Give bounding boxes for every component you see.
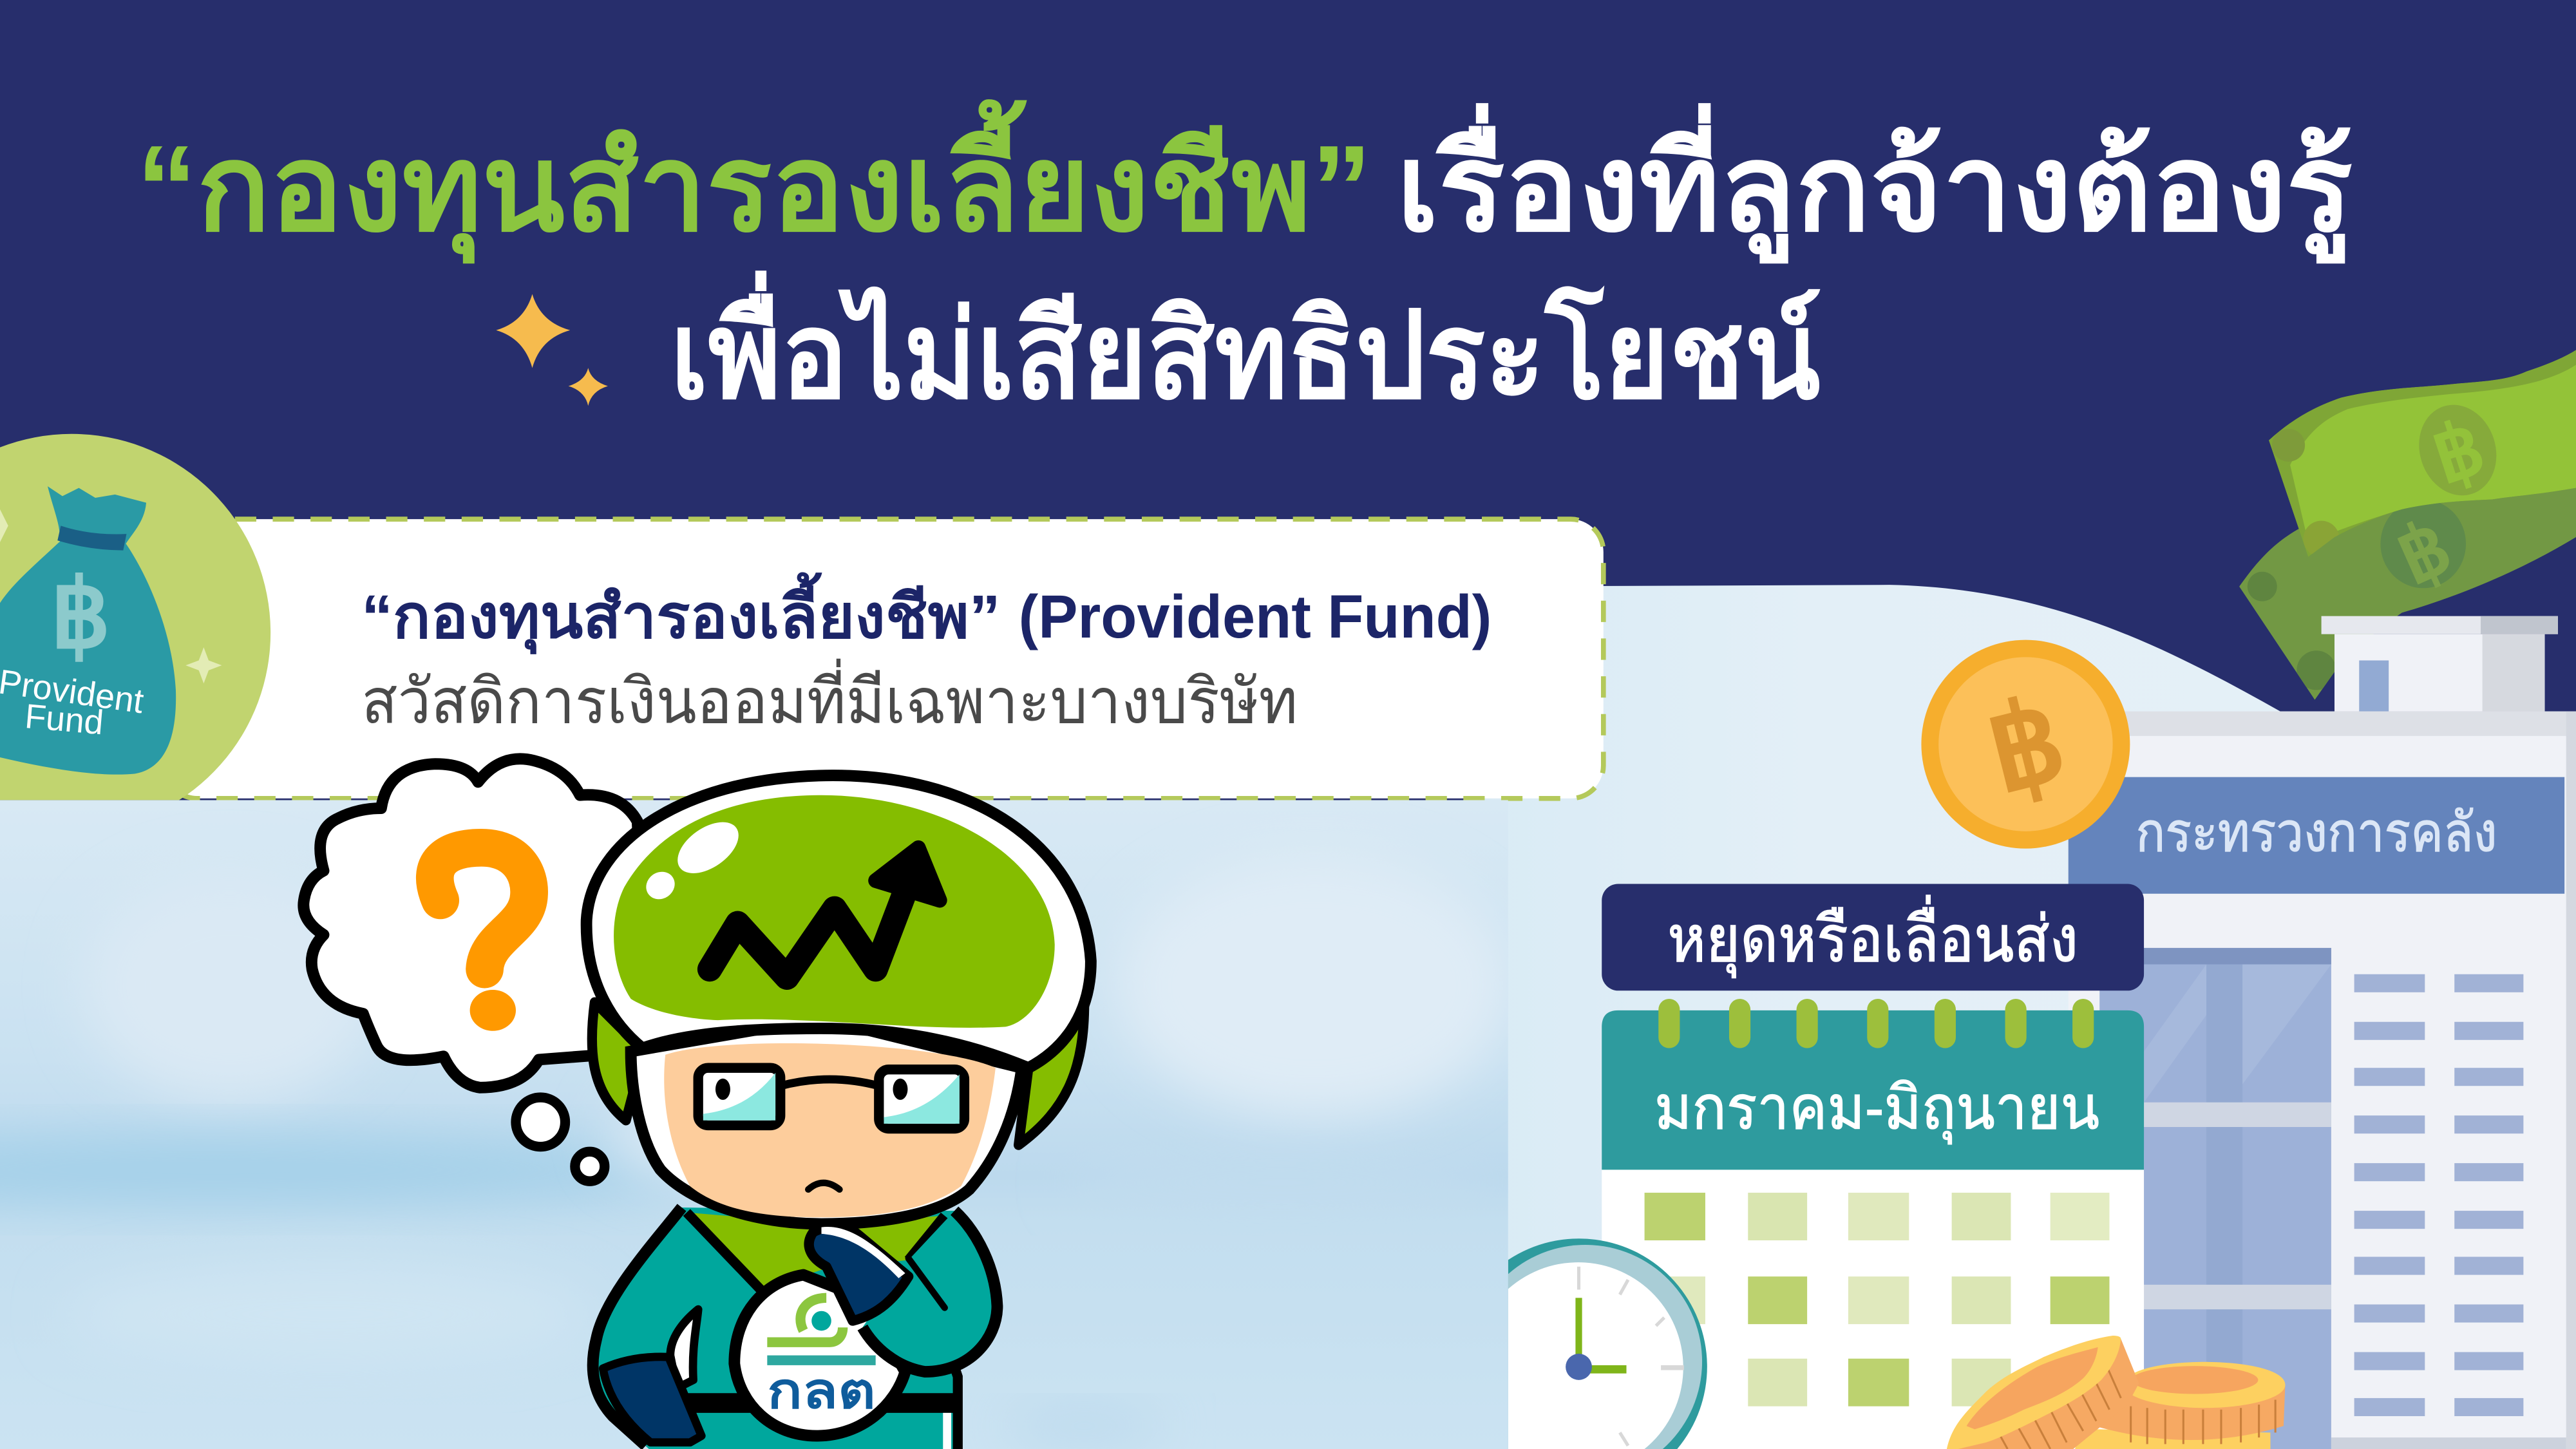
bottom coin — [2075, 1429, 2271, 1449]
badge — [734, 1275, 905, 1436]
calendar header — [1602, 1010, 2144, 1170]
title — [137, 99, 2353, 424]
title line 1 green: “กองทุนสำรองเลี้ยงชีพ” — [137, 99, 1372, 263]
calendar day cells — [1645, 1193, 2110, 1406]
calendar — [1602, 884, 2144, 1449]
ministry sign — [2069, 777, 2564, 894]
definition text: สวัสดิการเงินออมที่มีเฉพาะบางบริษัท — [361, 658, 1298, 736]
stop or postpone label: หยุดหรือเลื่อนส่ง — [1667, 895, 2078, 978]
ear flaps — [592, 1002, 1084, 1145]
belt — [682, 1393, 958, 1413]
helmet — [587, 775, 1091, 1068]
right arm and glove — [809, 1211, 997, 1372]
back banknote — [2239, 488, 2576, 699]
roof band — [2073, 712, 2576, 736]
stop or postpone label — [1602, 884, 2144, 990]
icon: gold coin — [1921, 640, 2130, 849]
month label: มกราคม-มิถุนายน — [1654, 1075, 2099, 1145]
body — [593, 1208, 998, 1449]
facade — [2069, 736, 2566, 1449]
back banknote: ฿ — [2385, 504, 2463, 600]
calendar sheet — [1602, 1150, 2144, 1449]
glass front — [2099, 948, 2331, 1449]
ministry sign: กระทรวงการคลัง — [2136, 802, 2497, 862]
banknotes — [2239, 350, 2576, 700]
rooftop box — [2334, 634, 2545, 712]
icon: rising chart arrow — [710, 848, 940, 978]
glasses — [698, 1068, 964, 1129]
icon: gold coin: ฿ — [1975, 674, 2077, 817]
icon: money bag: Provident — [0, 663, 146, 721]
face — [631, 1019, 1022, 1224]
building: ministry of finance — [2069, 616, 2576, 1449]
definition heading thai: “กองทุนสำรองเลี้ยงชีพ” — [361, 572, 1001, 654]
icon: gold coin stack — [1947, 1336, 2285, 1449]
front banknote — [2269, 350, 2576, 557]
icon: money bag: Fund — [23, 697, 105, 742]
pale background hill — [1479, 585, 2576, 1449]
sky backdrop — [0, 800, 1511, 1449]
front banknote: ฿ — [2422, 404, 2494, 500]
tilted coin — [1947, 1336, 2139, 1449]
icon: money bag: ฿ — [50, 562, 111, 668]
panel: definition — [164, 519, 1604, 799]
character: thinking mascot — [303, 759, 1091, 1449]
title line 1 white: เรื่องที่ลูกจ้างต้องรู้ — [1396, 103, 2353, 264]
spiral rings — [1658, 999, 2094, 1048]
title line 2: เพื่อไม่เสียสิทธิประโยชน์ — [670, 270, 1821, 424]
badge: กลต — [767, 1364, 876, 1419]
arm slit — [670, 1309, 698, 1388]
left glove — [603, 1357, 701, 1443]
definition heading english: (Provident Fund) — [1019, 583, 1492, 651]
windows — [2354, 974, 2523, 1416]
thought bubble — [303, 759, 649, 1181]
icon: clock — [1508, 1238, 1707, 1449]
icon: money bag — [0, 434, 270, 800]
icon: sparkles — [496, 294, 608, 406]
icon: question mark — [435, 848, 529, 1031]
stacked coin — [2095, 1362, 2285, 1444]
